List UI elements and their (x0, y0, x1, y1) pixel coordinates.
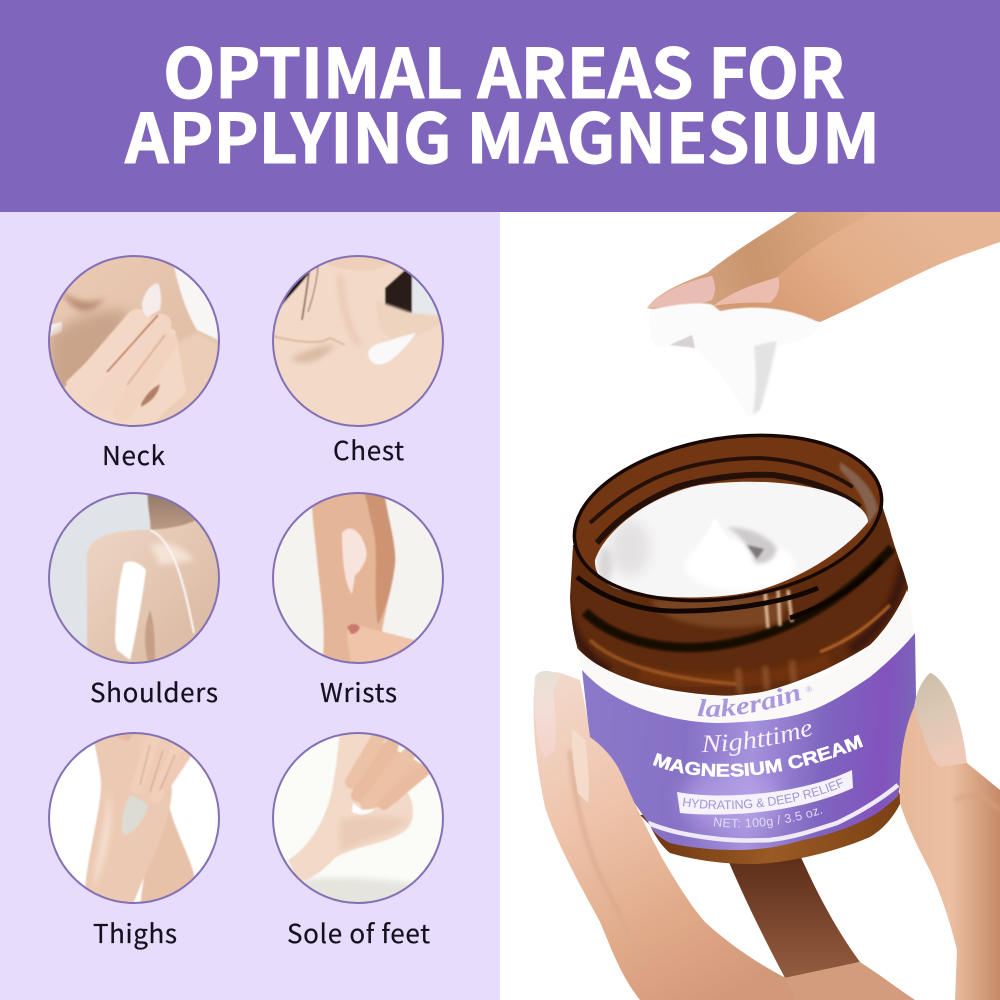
photo circle: thighs (45, 729, 223, 910)
photo circle: chest (269, 252, 447, 430)
label: Chest: Chest (333, 431, 404, 468)
cream dollop (649, 303, 820, 417)
palm under jar (728, 855, 860, 978)
knuckle shading (955, 796, 1000, 810)
product name: MAGNESIUM CREAM (652, 734, 864, 777)
fingers with cream at top (647, 212, 1000, 417)
label: Neck: Neck (102, 436, 166, 473)
photo circle: shoulders (45, 489, 225, 670)
jar label purple area (582, 633, 916, 850)
magnesium cream jar (570, 434, 916, 864)
cream underside shadow (670, 335, 695, 348)
rim edge (562, 415, 894, 621)
front finger (713, 212, 1000, 322)
registered mark: ® (806, 685, 812, 694)
photo circle: neck (45, 252, 223, 430)
back finger (647, 212, 880, 320)
label: Wrists: Wrists (320, 673, 397, 710)
left lilac panel background (0, 212, 500, 1000)
jar bottom amber base (640, 790, 902, 864)
left second finger nail (572, 728, 589, 803)
jar label white band (577, 590, 916, 760)
product word: Nighttime: Nighttime (702, 724, 812, 756)
jar rim interior glass (563, 416, 893, 620)
label: Shoulders: Shoulders (90, 673, 218, 710)
title banner (0, 0, 1000, 212)
right white panel background (500, 212, 1000, 1000)
label highlight (680, 770, 780, 830)
swirl shadow (727, 527, 777, 563)
cream peak (704, 522, 724, 541)
photo circle: wrists (269, 489, 447, 670)
claim box (677, 770, 853, 815)
cream shadow (753, 341, 777, 414)
lower hand skin (785, 962, 915, 1000)
right hand nail (915, 673, 967, 767)
front fingernail (713, 277, 779, 306)
brand name: lakerain (698, 688, 802, 717)
title line 2: APPLYING MAGNESIUM (124, 84, 880, 183)
label: Sole of feet: Sole of feet (287, 914, 430, 951)
cream surface (594, 482, 868, 598)
claim text: HYDRATING & DEEP RELIEF (682, 778, 843, 810)
back fingernail (647, 276, 715, 308)
label stripe (648, 785, 898, 841)
jar shoulder and neck (570, 505, 908, 696)
shoulder highlights (565, 548, 905, 694)
right hand holding jar (900, 673, 1000, 1000)
title line 1: OPTIMAL AREAS FOR (163, 19, 845, 118)
photo circle: sole of feet (269, 729, 447, 910)
inner threads (590, 458, 878, 543)
net weight: NET: 100g / 3.5 oz. (714, 808, 822, 828)
left hand holding jar (534, 671, 797, 1000)
label: Thighs: Thighs (93, 914, 177, 951)
finger crease (570, 750, 645, 965)
left hand nail (534, 671, 560, 758)
